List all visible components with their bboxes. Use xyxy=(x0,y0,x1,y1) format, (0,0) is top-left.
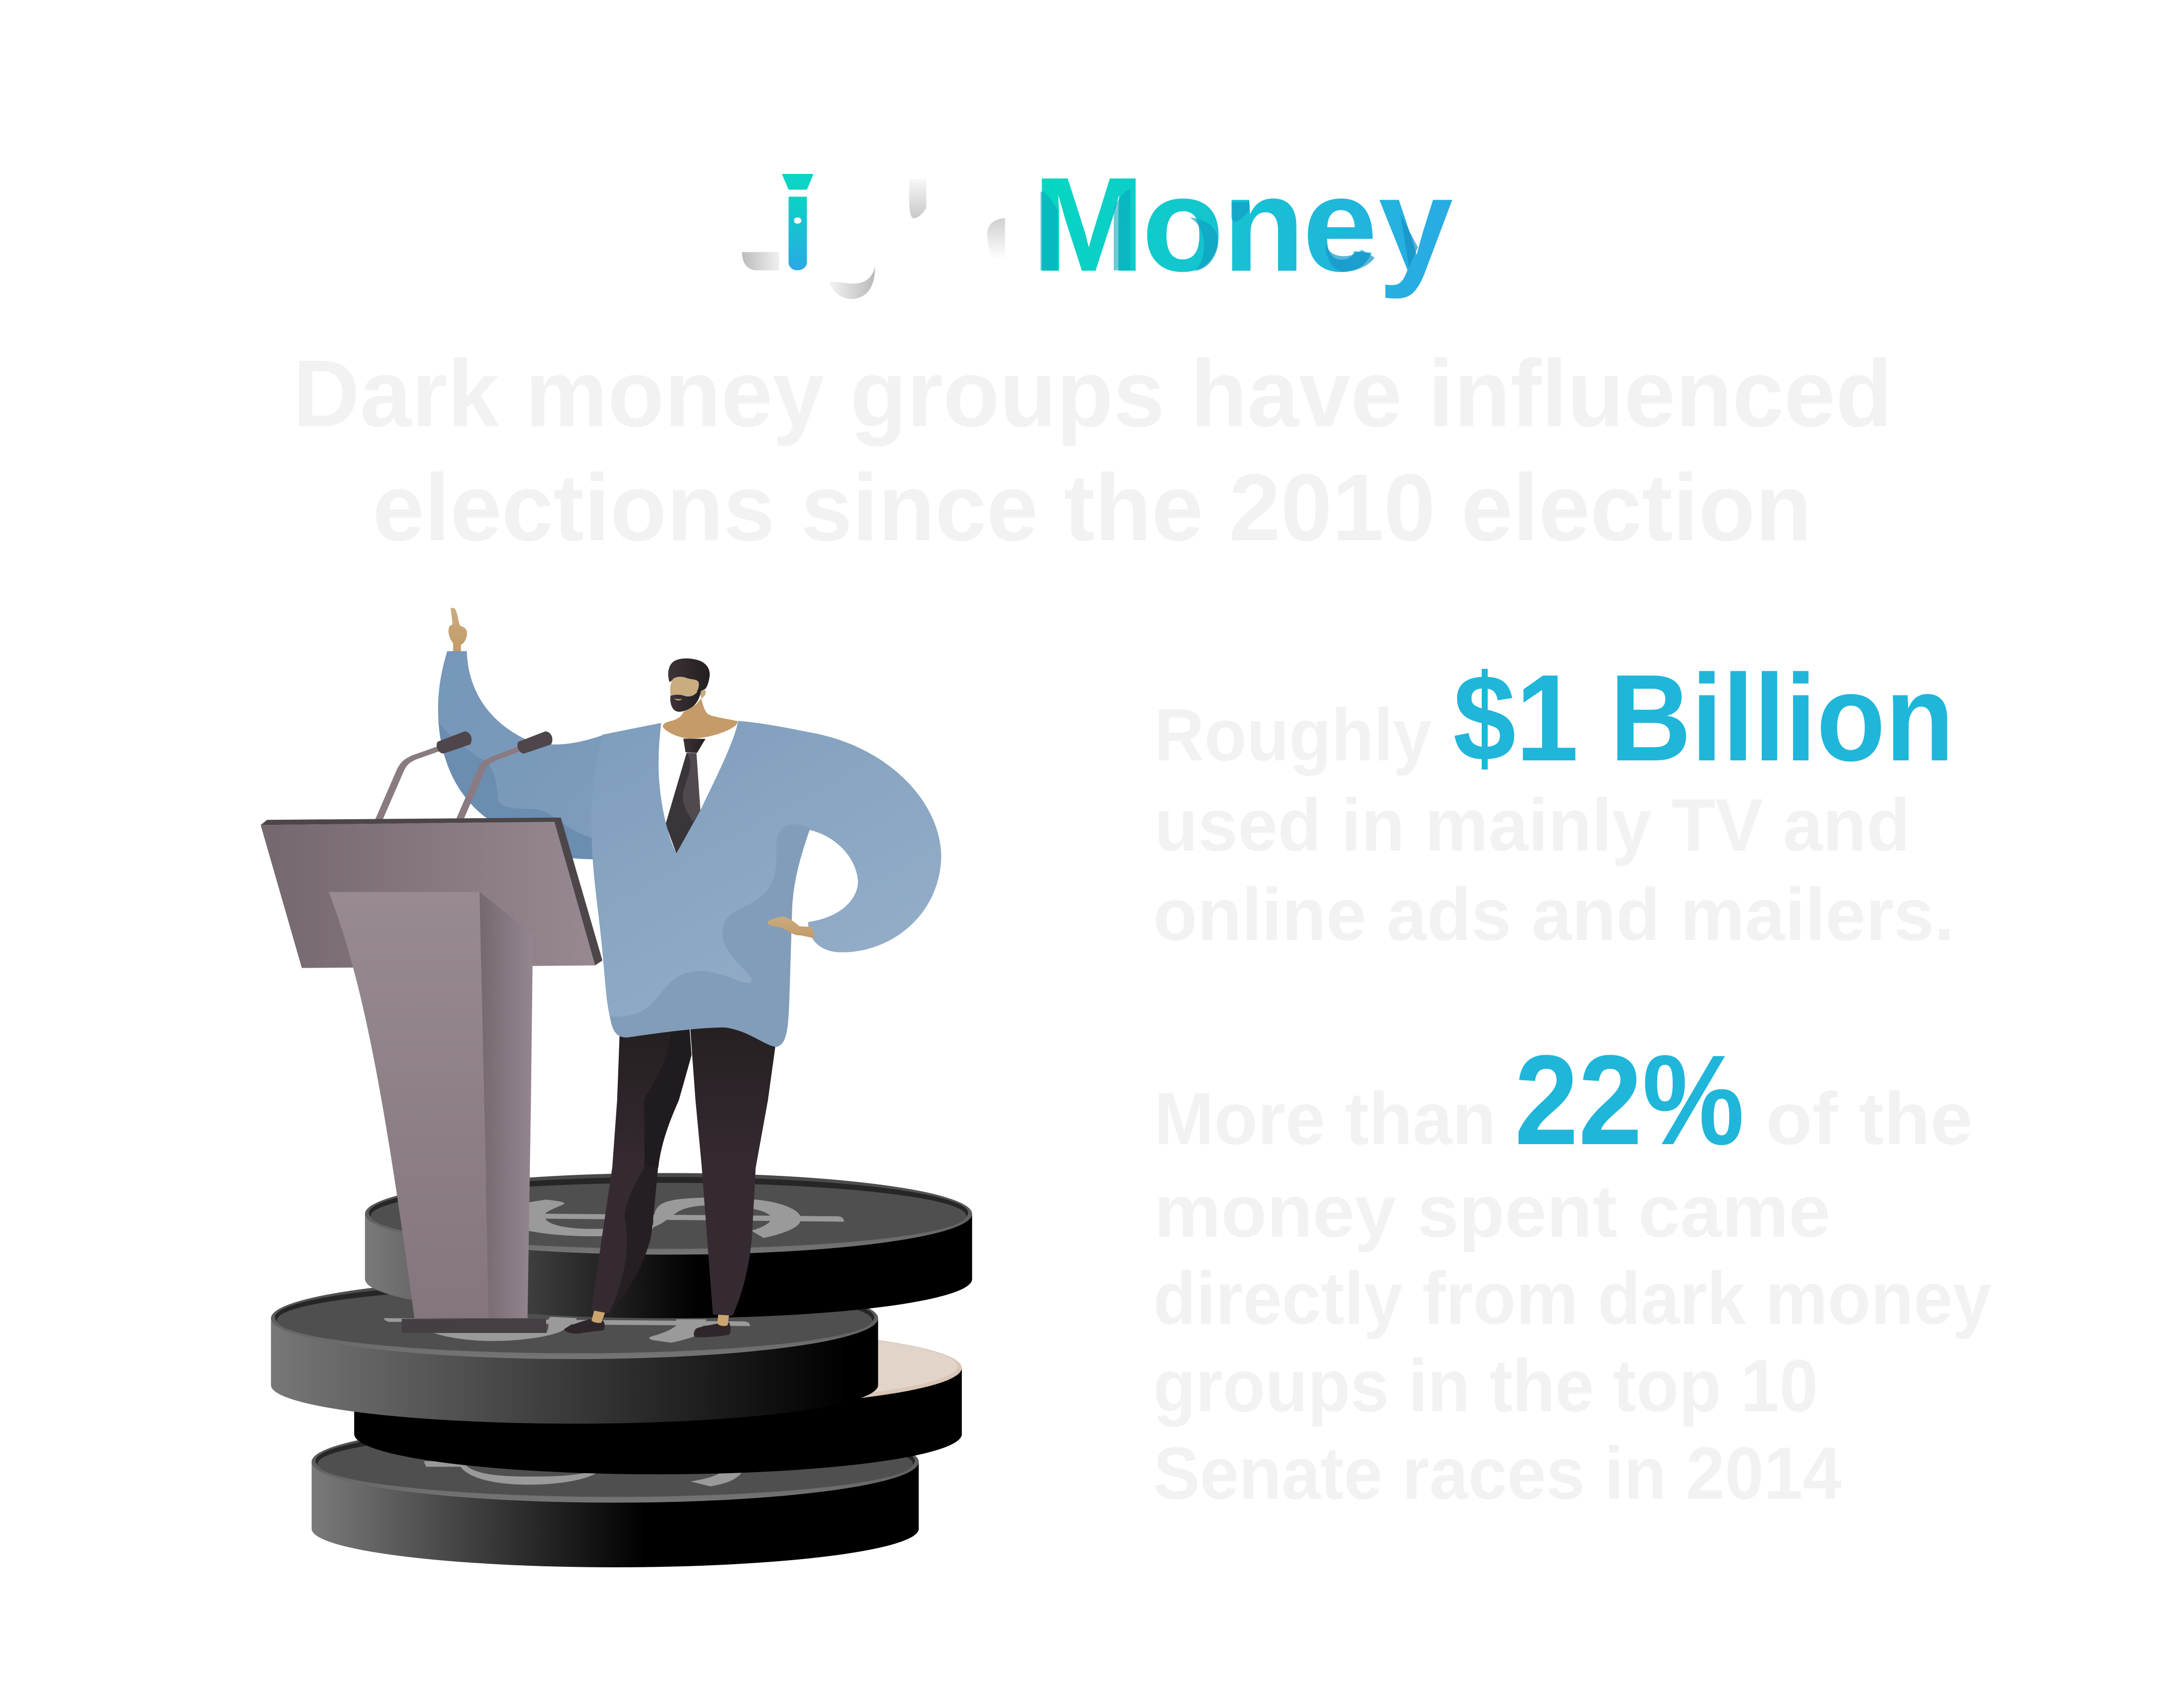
stat: twenty-two percent xyxy=(1153,1028,1992,1515)
speaker and podium xyxy=(261,608,941,1333)
stat text: of the: of the xyxy=(1766,1077,1973,1160)
tie xyxy=(665,753,700,854)
logo word: Money: Money xyxy=(1033,149,1454,300)
podium base xyxy=(402,1319,546,1333)
coin 2 xyxy=(271,1278,878,1424)
upper trousers xyxy=(612,1013,775,1168)
logo word: Light (white): Light xyxy=(742,151,1013,300)
dollar sign on coin 1 xyxy=(505,1198,844,1238)
stat text: More than: More than xyxy=(1154,1077,1496,1160)
shirt xyxy=(659,721,738,854)
podium desk rim xyxy=(261,818,602,966)
stat text line 2: used in mainly TV and xyxy=(1154,783,1910,866)
podium desk top xyxy=(261,822,595,968)
logo: Light Money xyxy=(742,149,1454,300)
stat number: $1 Billion: $1 Billion xyxy=(1453,649,1954,787)
stat text line 4: groups in the top 10 xyxy=(1153,1344,1818,1427)
logo letter shadows and flashlight i xyxy=(742,174,1418,299)
lower trousers xyxy=(591,1167,756,1316)
coin stack xyxy=(271,1278,962,1567)
title xyxy=(293,341,1892,561)
podium xyxy=(261,818,602,1333)
stat number: 22%: 22% xyxy=(1515,1028,1744,1171)
stat: one billion xyxy=(1153,649,1954,956)
podium column side xyxy=(480,892,533,1318)
coin 3 (beige top) xyxy=(354,1327,962,1474)
stat text line 2: money spent came xyxy=(1154,1170,1830,1253)
podium column front xyxy=(329,892,489,1318)
coin 4 (bottom) xyxy=(312,1421,919,1567)
stat text line 5: Senate races in 2014 xyxy=(1153,1432,1842,1515)
hand on hip xyxy=(768,916,814,938)
feet xyxy=(564,1310,730,1337)
stat text: Roughly: Roughly xyxy=(1154,693,1432,776)
title line 1: Dark money groups have influenced xyxy=(293,341,1892,447)
coin 1 (top) xyxy=(365,1173,972,1318)
dollar sign on coin 2 xyxy=(384,1317,750,1343)
stat text line 3: directly from dark money xyxy=(1153,1257,1992,1340)
title line 2: elections since the 2010 election xyxy=(373,455,1812,561)
raised hand xyxy=(448,608,467,651)
stat text line 3: online ads and mailers. xyxy=(1153,873,1954,956)
raised sleeve xyxy=(438,651,602,859)
head, neck and tie knot xyxy=(663,659,738,753)
sweater xyxy=(591,721,941,1047)
illustration: politician on a podium standing on coins xyxy=(261,608,972,1567)
microphones xyxy=(379,731,552,820)
